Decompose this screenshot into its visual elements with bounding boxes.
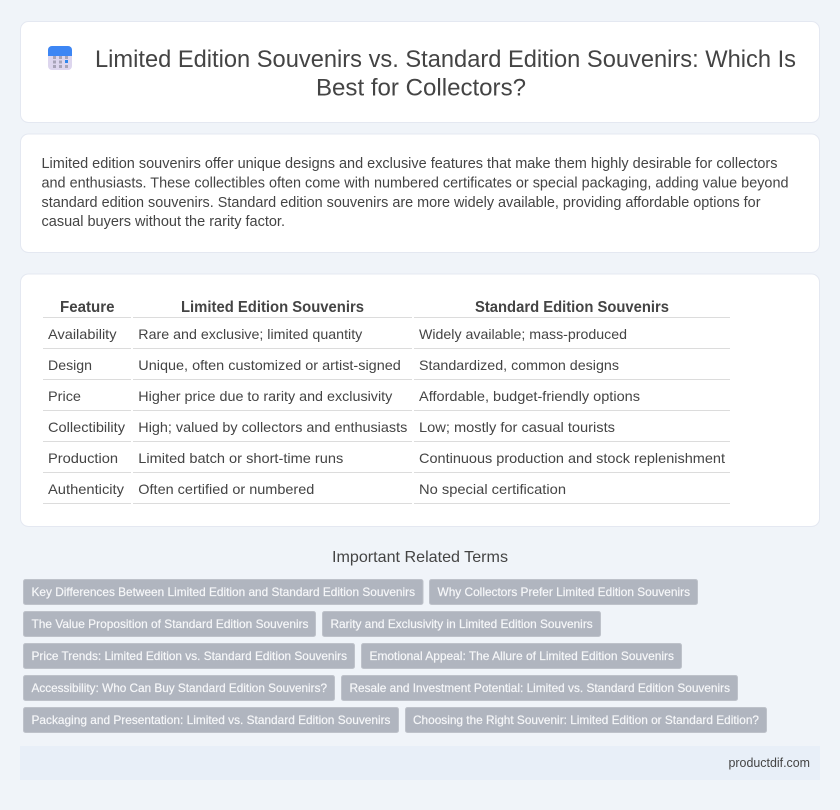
- panel: introduction: [20, 134, 820, 252]
- table header: Limited Edition Souvenirs: [181, 299, 364, 316]
- row: price: Higher price due to rarity and exclusivity: [138, 388, 392, 404]
- row: authenticity: Authenticity: [48, 481, 124, 497]
- row: production: Production: [48, 450, 118, 466]
- tag: [24, 580, 423, 604]
- row: availability: Rare and exclusive; limited quantity: [138, 326, 362, 342]
- tag: [430, 580, 698, 604]
- tag: [342, 676, 738, 700]
- row: authenticity: Often certified or numbered: [138, 481, 314, 497]
- row: price: Price: [48, 388, 81, 404]
- row: design: Unique, often customized or artist-signed: [138, 357, 401, 373]
- row: design: Design: [48, 357, 92, 373]
- tag: [24, 676, 334, 700]
- tag: Packaging and Presentation: Limited vs. Standard Edition Souvenirs: [32, 713, 390, 727]
- tag: Key Differences Between Limited Edition and Standard Edition Souvenirs: [32, 585, 415, 599]
- title: Best for Collectors?: [316, 74, 526, 102]
- intro text: standard edition souvenirs. Standard edition souvenirs are more widely available, providing affordable options for: [42, 195, 761, 211]
- tag: Rarity and Exclusivity in Limited Edition Souvenirs: [330, 617, 593, 631]
- row: collectibility: Collectibility: [48, 419, 125, 435]
- row: price: [43, 388, 730, 410]
- title: [95, 46, 796, 102]
- tag: [322, 612, 600, 636]
- tag: [24, 612, 316, 636]
- panel: title header: [20, 22, 820, 122]
- row: availability: [43, 326, 730, 348]
- row: authenticity: No special certification: [419, 481, 566, 497]
- intro text: Limited edition souvenirs offer unique designs and exclusive features that make them highly desirable for collectors: [42, 156, 778, 172]
- title: Limited Edition Souvenirs vs. Standard Edition Souvenirs: Which Is: [95, 46, 796, 73]
- intro text: and enthusiasts. These collectibles often come with numbered certificates or special packaging, adding value beyond: [42, 176, 788, 192]
- tag: Emotional Appeal: The Allure of Limited Edition Souvenirs: [370, 649, 674, 663]
- row: authenticity: [43, 481, 730, 504]
- tag: [24, 708, 398, 732]
- table header: Standard Edition Souvenirs: [475, 299, 669, 316]
- footer: productdif.com: [728, 755, 810, 770]
- row: design: Standardized, common designs: [419, 357, 619, 373]
- heading: important related terms: Important Related Terms: [332, 549, 508, 566]
- row: price: Affordable, budget-friendly options: [419, 388, 640, 404]
- row: availability: Widely available; mass-produced: [419, 326, 627, 342]
- tag: [406, 708, 766, 732]
- intro text: [42, 156, 788, 230]
- tag: Why Collectors Prefer Limited Edition Souvenirs: [438, 585, 690, 599]
- tag: Resale and Investment Potential: Limited vs. Standard Edition Souvenirs: [350, 681, 730, 695]
- table header: Feature: [60, 299, 115, 316]
- row: design: [43, 357, 730, 380]
- tag: The Value Proposition of Standard Edition Souvenirs: [32, 617, 308, 631]
- row: collectibility: Low; mostly for casual tourists: [419, 419, 615, 435]
- row: availability: Availability: [48, 326, 116, 342]
- tag: Accessibility: Who Can Buy Standard Edition Souvenirs?: [32, 681, 327, 695]
- table header: [43, 299, 730, 318]
- panel: comparison table: [20, 274, 820, 526]
- footer: [20, 746, 820, 780]
- intro text: casual buyers without the rarity factor.: [42, 214, 285, 230]
- tag: Price Trends: Limited Edition vs. Standard Edition Souvenirs: [32, 649, 347, 663]
- tag: [362, 644, 682, 668]
- row: production: [43, 450, 730, 472]
- tag list: [24, 580, 766, 732]
- tag: [24, 644, 354, 668]
- row: collectibility: High; valued by collectors and enthusiasts: [138, 419, 407, 435]
- icon: calendar: [48, 46, 72, 70]
- row: production: Continuous production and stock replenishment: [419, 450, 725, 466]
- tag: Choosing the Right Souvenir: Limited Edition or Standard Edition?: [413, 713, 759, 727]
- row: production: Limited batch or short-time runs: [138, 450, 343, 466]
- row: collectibility: [43, 419, 730, 442]
